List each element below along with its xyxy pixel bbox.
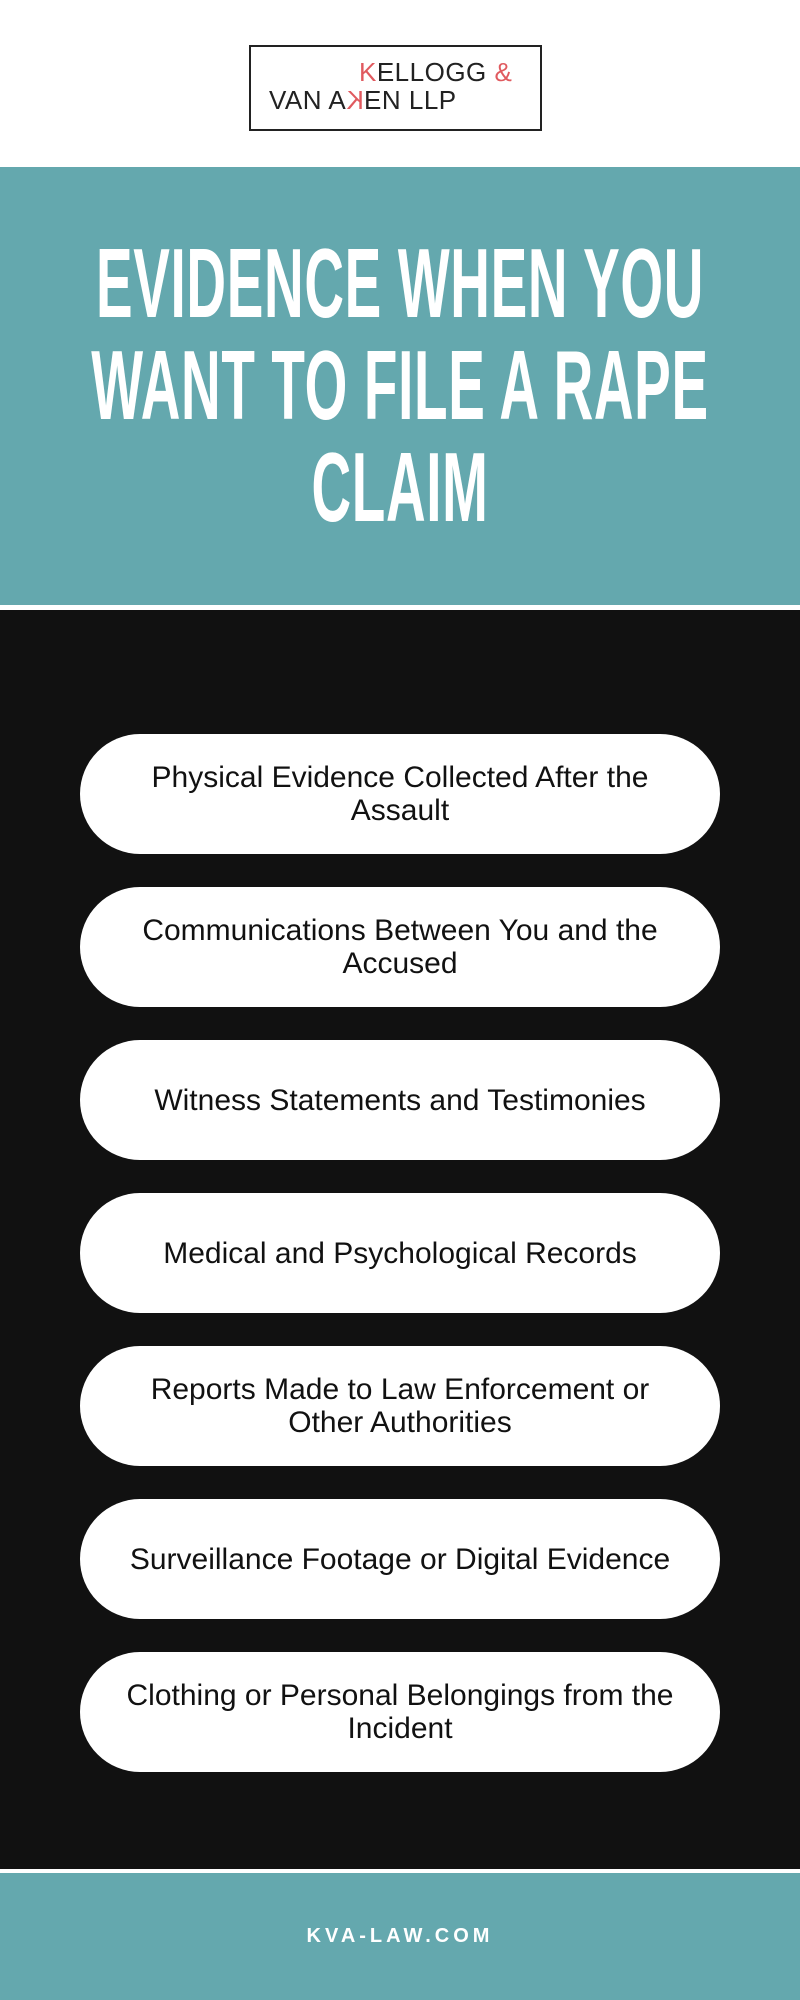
pill 4: [80, 1193, 720, 1313]
pill 5: [80, 1346, 720, 1466]
pill 1: Physical Evidence Collected After the Assault: [152, 761, 648, 827]
title: CLAIM: [311, 432, 489, 542]
pill 2: [80, 887, 720, 1007]
title: WANT TO FILE A RAPE: [91, 330, 709, 440]
pill 4: Medical and Psychological Records: [163, 1236, 637, 1270]
logo: [249, 45, 542, 131]
pill 7: Clothing or Personal Belongings from the Incident: [126, 1679, 673, 1745]
logo: KELLOGG &: [359, 57, 512, 87]
pill 3: [80, 1040, 720, 1160]
title: [91, 228, 709, 542]
logo: K: [346, 85, 364, 115]
pill 3: Witness Statements and Testimonies: [154, 1084, 646, 1116]
pill 6: Surveillance Footage or Digital Evidence: [130, 1542, 670, 1576]
pill 6: [80, 1499, 720, 1619]
header panel: [0, 167, 800, 605]
pill 5: Reports Made to Law Enforcement or Other Authorities: [151, 1373, 649, 1439]
footer text: KVA-LAW.COM: [307, 1925, 493, 1947]
logo: VAN A EN LLP: [269, 85, 457, 115]
title: EVIDENCE WHEN YOU: [96, 228, 704, 338]
pill 1: [80, 734, 720, 854]
pill 7: [80, 1652, 720, 1772]
footer: [0, 1873, 800, 2000]
pill 2: Communications Between You and the Accused: [142, 914, 658, 980]
panel: evidence list: [0, 610, 800, 1869]
